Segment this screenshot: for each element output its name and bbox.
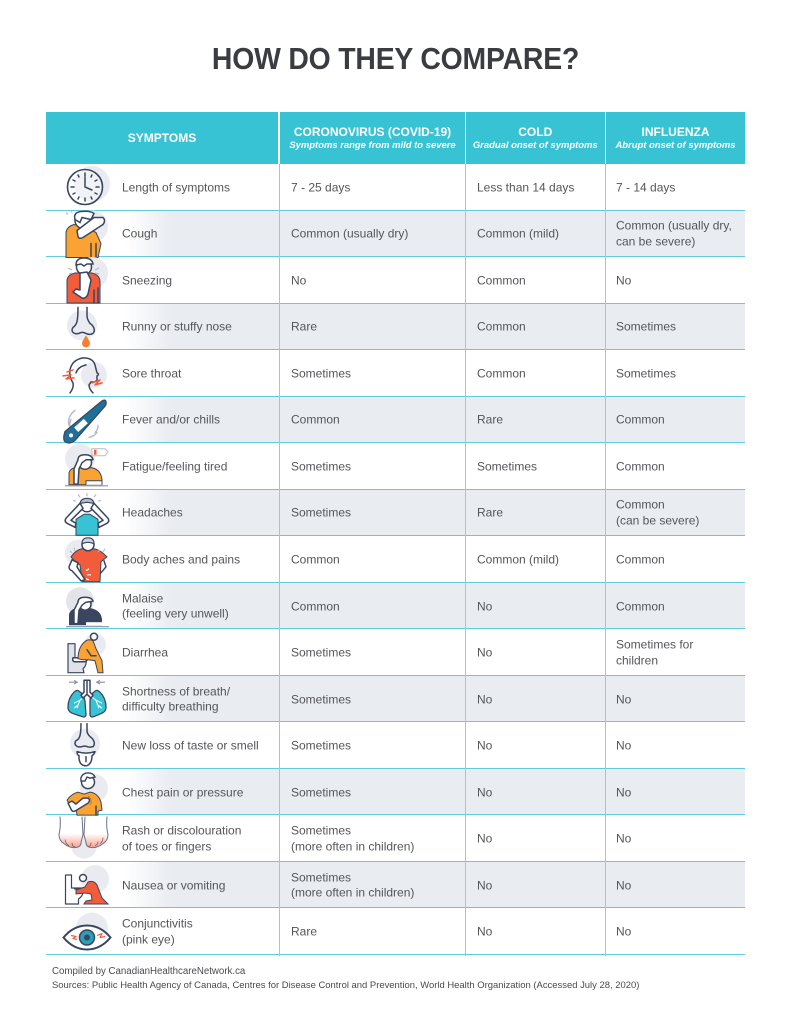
influenza value	[616, 498, 699, 527]
symptom label	[122, 591, 229, 621]
row: shortness of breath	[46, 676, 745, 722]
row: body aches	[46, 536, 745, 583]
icon: unwell person	[66, 587, 109, 628]
icon: lungs	[67, 680, 107, 718]
covid value: Common	[291, 599, 340, 613]
covid value: Sometimes	[291, 824, 351, 838]
cold value: Common (mild)	[477, 227, 559, 241]
covid value: Common	[291, 552, 340, 566]
symptom label: Diarrhea	[122, 645, 168, 659]
influenza value: No	[616, 878, 631, 892]
symptom label	[122, 824, 241, 853]
footer sources: Sources: Public Health Agency of Canada, Centres for Disease Control and Prevention, World Health Organization (Accessed July 28, 2020)	[52, 980, 639, 991]
influenza value: No	[616, 924, 631, 938]
row: runny nose	[46, 304, 745, 350]
influenza value: No	[616, 738, 631, 752]
cold value: Common	[477, 366, 526, 380]
influenza value: No	[616, 785, 631, 799]
icon: toes with rash	[58, 816, 108, 858]
influenza value: (can be severe)	[616, 513, 699, 527]
cold value: No	[477, 599, 492, 613]
icon: person on toilet	[67, 632, 106, 674]
icon: clock	[66, 166, 110, 206]
row: cough	[46, 211, 745, 257]
row: length of symptoms	[46, 164, 745, 211]
row: headaches	[46, 490, 745, 536]
icon: red eye	[62, 912, 112, 950]
influenza value: can be severe)	[616, 234, 695, 248]
header: coronavirus: CORONOVIRUS (COVID-19)	[294, 125, 451, 139]
covid value: Sometimes	[291, 506, 351, 520]
influenza value	[616, 219, 732, 248]
symptom label	[122, 917, 193, 946]
influenza value: Sometimes	[616, 320, 676, 334]
covid value	[291, 824, 414, 853]
header: symptoms: SYMPTOMS	[128, 131, 196, 145]
influenza value: No	[616, 831, 631, 845]
row: loss of taste or smell	[46, 722, 745, 769]
cold value: Less than 14 days	[477, 180, 574, 194]
footer sources	[52, 966, 639, 991]
cold value: Common	[477, 273, 526, 287]
header: symptoms	[46, 112, 278, 164]
symptom label: Rash or discolouration	[122, 824, 241, 838]
influenza value: No	[616, 692, 631, 706]
covid value	[291, 870, 414, 900]
symptom label: Sore throat	[122, 366, 181, 380]
cold value: Common (mild)	[477, 552, 559, 566]
symptom label: (pink eye)	[122, 932, 175, 946]
row: sore throat	[46, 350, 745, 397]
covid value: Sometimes	[291, 870, 351, 884]
symptom label: Conjunctivitis	[122, 917, 193, 931]
header: cold: Gradual onset of symptoms	[473, 140, 598, 151]
cold value: No	[477, 831, 492, 845]
covid value: Sometimes	[291, 692, 351, 706]
covid value: Common	[291, 413, 340, 427]
influenza value: children	[616, 653, 658, 667]
influenza value: Common (usually dry,	[616, 219, 732, 233]
icon: tired person	[65, 444, 108, 486]
influenza value: Sometimes	[616, 366, 676, 380]
cold value: Rare	[477, 506, 503, 520]
icon: person sneezing	[66, 257, 108, 304]
symptom label: difficulty breathing	[122, 700, 219, 714]
symptom label: Cough	[122, 227, 157, 241]
cold value: Rare	[477, 413, 503, 427]
cold value: No	[477, 692, 492, 706]
row: fatigue	[46, 443, 745, 490]
icon: person holding chest	[66, 772, 108, 816]
row: diarrhea	[46, 629, 745, 676]
row: malaise	[46, 583, 745, 629]
influenza value: Common	[616, 413, 665, 427]
row: rash	[46, 815, 745, 862]
influenza value: No	[616, 273, 631, 287]
icon: person vomiting	[64, 865, 110, 905]
influenza value	[616, 638, 694, 667]
row: sneezing	[46, 257, 745, 304]
covid value: (more often in children)	[291, 839, 414, 853]
symptom label: New loss of taste or smell	[122, 738, 259, 752]
icon: runny nose	[67, 306, 97, 348]
icon: person coughing	[66, 210, 108, 258]
covid value: Sometimes	[291, 459, 351, 473]
symptom label: Runny or stuffy nose	[122, 320, 232, 334]
symptom label: Malaise	[122, 591, 163, 605]
header: cold: COLD	[518, 125, 552, 139]
symptom label: Sneezing	[122, 273, 172, 287]
cold value: No	[477, 878, 492, 892]
covid value: Common (usually dry)	[291, 227, 408, 241]
icon: thermometer	[63, 400, 107, 444]
title: HOW DO THEY COMPARE?	[212, 41, 579, 76]
row: fever	[46, 397, 745, 443]
symptom label	[122, 684, 230, 714]
symptom label: (feeling very unwell)	[122, 607, 229, 621]
symptom label: Shortness of breath/	[122, 684, 230, 698]
icon: person with headache	[64, 493, 110, 536]
header: cold	[466, 112, 604, 164]
influenza value: Sometimes for	[616, 638, 693, 652]
row: chest pain	[46, 769, 745, 815]
covid value: Sometimes	[291, 366, 351, 380]
symptom label: Chest pain or pressure	[122, 785, 243, 799]
row: nausea	[46, 862, 745, 908]
symptom label: Headaches	[122, 506, 183, 520]
icon: sore throat	[62, 357, 107, 394]
covid value: No	[291, 273, 306, 287]
influenza value: Common	[616, 599, 665, 613]
cold value: No	[477, 924, 492, 938]
header: coronavirus: Symptoms range from mild to severe	[289, 140, 456, 151]
header: influenza: INFLUENZA	[642, 125, 710, 139]
covid value: Rare	[291, 924, 317, 938]
covid value: Rare	[291, 320, 317, 334]
symptom label: Length of symptoms	[122, 180, 230, 194]
symptom label: Body aches and pains	[122, 552, 240, 566]
icon: nose and tongue	[70, 722, 100, 766]
symptom label: of toes or fingers	[122, 839, 211, 853]
header: coronavirus	[280, 112, 465, 164]
symptom label: Fatigue/feeling tired	[122, 459, 227, 473]
row: conjunctivitis	[46, 908, 745, 955]
symptom label: Nausea or vomiting	[122, 878, 225, 892]
influenza value: Common	[616, 498, 665, 512]
comparison table	[46, 112, 745, 956]
cold value: No	[477, 785, 492, 799]
covid value: 7 - 25 days	[291, 180, 350, 194]
cold value: No	[477, 645, 492, 659]
cold value: No	[477, 738, 492, 752]
covid value: (more often in children)	[291, 886, 414, 900]
covid value: Sometimes	[291, 738, 351, 752]
covid value: Sometimes	[291, 785, 351, 799]
cold value: Common	[477, 320, 526, 334]
footer sources: Compiled by CanadianHealthcareNetwork.ca	[52, 966, 245, 977]
cold value: Sometimes	[477, 459, 537, 473]
icon: person with back pain	[65, 537, 108, 582]
header: influenza	[606, 112, 745, 164]
influenza value: 7 - 14 days	[616, 180, 675, 194]
influenza value: Common	[616, 459, 665, 473]
covid value: Sometimes	[291, 645, 351, 659]
symptom label: Fever and/or chills	[122, 413, 220, 427]
header: influenza: Abrupt onset of symptoms	[615, 140, 736, 151]
influenza value: Common	[616, 552, 665, 566]
